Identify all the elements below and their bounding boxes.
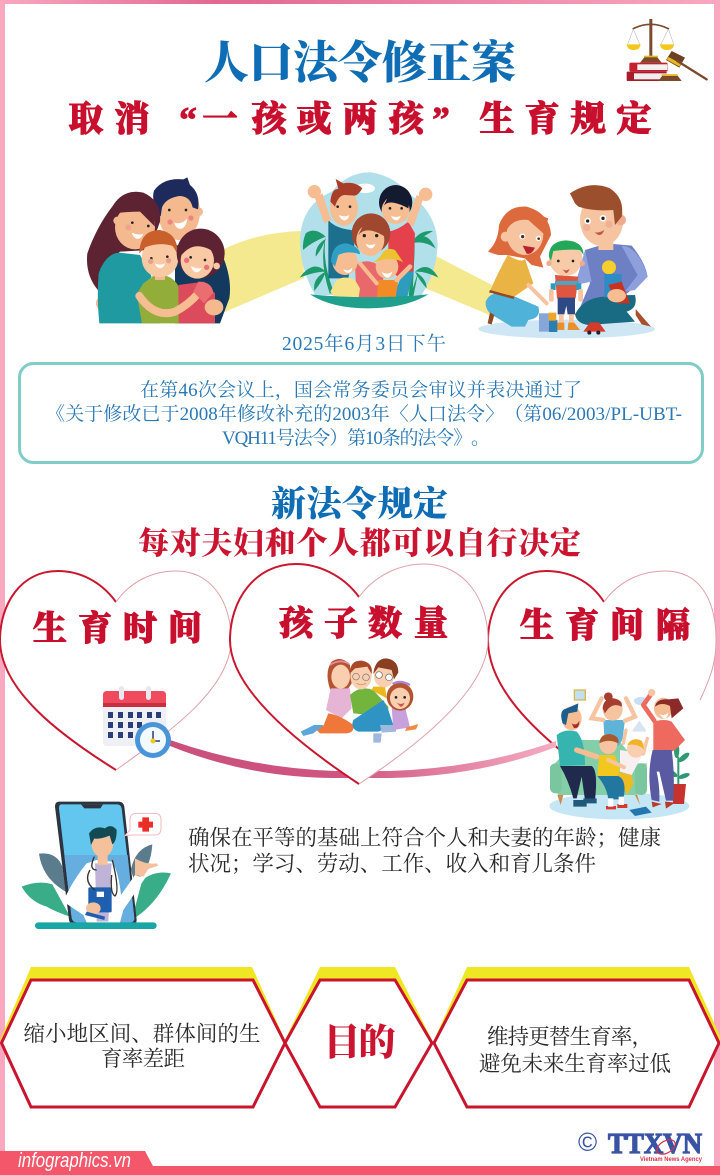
heart: left xyxy=(0,571,231,770)
label: number of children: 孩子数量 xyxy=(279,605,448,643)
hexagon: narrowing gaps xyxy=(0,967,285,1107)
logo: TTXVN: Vietnam News Agency xyxy=(640,1157,703,1163)
conditions text xyxy=(188,826,661,876)
illustration: family in living room xyxy=(549,689,691,819)
illustration: family hugging xyxy=(87,177,230,323)
subheading: couples decide: 每对夫妇和个人都可以自行决定 xyxy=(138,526,581,561)
heart: right xyxy=(488,571,716,785)
text: maintain replacement fertility: 避免未来生育率过低 xyxy=(479,1052,671,1076)
text: narrowing gaps: 缩小地区间、群体间的生 xyxy=(24,1022,260,1046)
logo: TTXVN: © xyxy=(578,1127,597,1157)
text: narrowing gaps xyxy=(24,1022,260,1071)
conditions text: 状况；学习、劳动、工作、收入和育儿条件 xyxy=(188,852,596,876)
yellow ribbons xyxy=(220,231,492,316)
text: narrowing gaps: 育率差距 xyxy=(101,1047,185,1071)
logo: TTXVN xyxy=(578,1127,703,1163)
label: birth timing: 生育时间 xyxy=(33,609,202,648)
resolution text: 《关于修改已于2008年修改补充的2003年〈人口法令〉（第06/2003/PL-UBT- xyxy=(46,403,682,425)
title: 人口法令修正案 xyxy=(204,37,516,88)
illustration: parents playing with child xyxy=(478,185,655,338)
heart: centre xyxy=(230,564,488,784)
logo: TTXVN: TTXVN xyxy=(608,1129,702,1160)
label: birth spacing: 生育间隔 xyxy=(520,606,690,645)
text: maintain replacement fertility xyxy=(479,1025,671,1076)
ribbon connecting hearts xyxy=(170,740,556,778)
resolution text xyxy=(46,379,682,449)
illustration: doctor on phone xyxy=(22,802,171,929)
illustration: family with palm trees xyxy=(300,172,438,308)
heading: new decree: 新法令规定 xyxy=(271,485,448,524)
footer: site name: infographics.vn xyxy=(18,1150,131,1172)
footer band xyxy=(0,1150,720,1175)
date: 2025年6月3日下午 xyxy=(282,333,446,355)
icon: scales of justice and gavel xyxy=(627,19,707,81)
icon: calendar and clock xyxy=(103,686,171,758)
resolution text: 在第46次会议上，国会常务委员会审议并表决通过了 xyxy=(140,379,582,401)
hexagon: maintain replacement fertility xyxy=(434,967,720,1107)
illustration: family sitting xyxy=(301,658,418,743)
text: maintain replacement fertility: 维持更替生育率， xyxy=(487,1025,653,1050)
resolution text: VQH11号法令）第10条的法令》。 xyxy=(222,427,490,449)
text: purpose: 目的 xyxy=(324,1022,396,1064)
conditions text: 确保在平等的基础上符合个人和夫妻的年龄；健康 xyxy=(188,826,661,850)
hexagon: purpose xyxy=(285,967,432,1107)
subtitle: 取消“一孩或两孩”生育规定 xyxy=(68,99,652,139)
panel: resolution text box xyxy=(20,364,702,462)
